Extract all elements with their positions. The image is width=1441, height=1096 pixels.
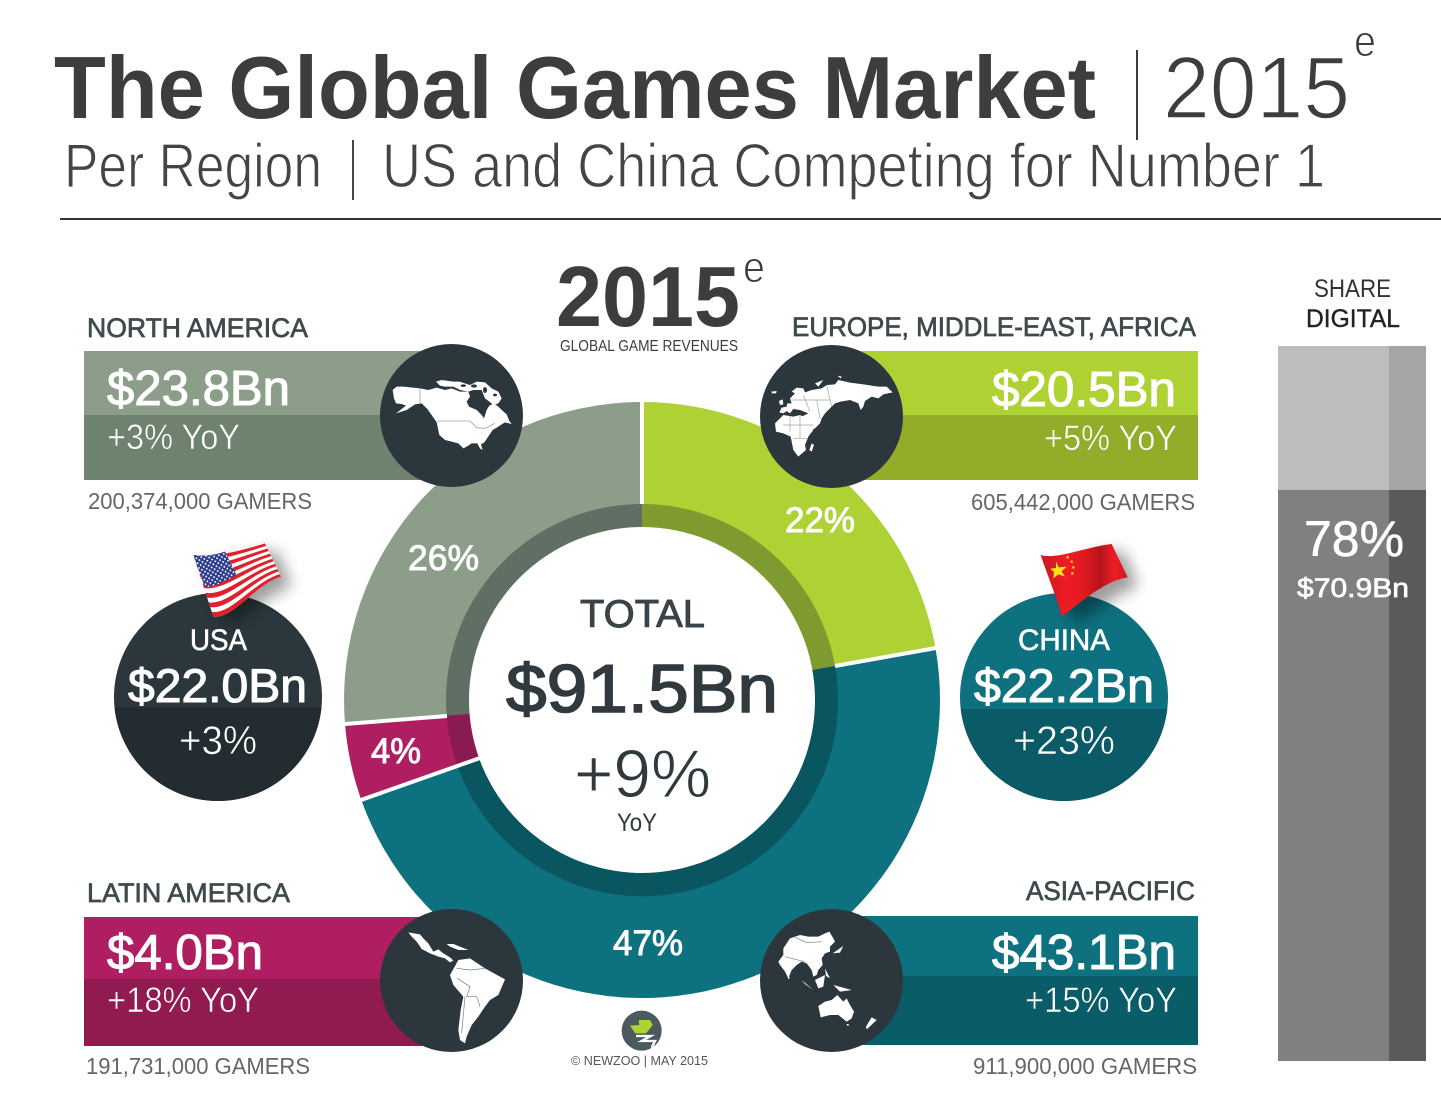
center total: YoY (617, 809, 657, 837)
china circle (960, 593, 1168, 801)
panel: share digital: DIGITAL (1306, 305, 1400, 333)
segment: Europe, Middle-East, Africa (642, 402, 936, 700)
panel: Europe, Middle-East, Africa (760, 312, 1198, 515)
panel: share digital: $70.9Bn (1297, 573, 1409, 603)
usa circle: +3% (179, 719, 257, 763)
icon: China flag (1041, 544, 1138, 623)
panel: share digital (1278, 275, 1426, 1061)
year heading: GLOBAL GAME REVENUES (560, 338, 738, 355)
panel: share digital: SHARE (1314, 275, 1391, 303)
logo: Newzoo (622, 1011, 662, 1051)
panel: North America: NORTH AMERICA (87, 313, 308, 343)
panel: Asia-Pacific: $43.1Bn (992, 926, 1176, 980)
panel: Europe, Middle-East, Africa: 605,442,000 GAMERS (971, 489, 1195, 515)
percent labels (371, 501, 855, 963)
center total: $91.5Bn (506, 651, 778, 727)
icon: Latin America map (408, 932, 505, 1043)
title: The Global Games Market (54, 38, 1096, 137)
segment: Latin America (345, 700, 642, 800)
usa circle: USA (190, 624, 247, 657)
china circle: CHINA (1018, 624, 1110, 657)
icon: North America map (393, 380, 512, 450)
segment: North America (344, 402, 642, 724)
percent labels: 47% (613, 924, 683, 963)
subtitle: US and China Competing for Number 1 (382, 132, 1325, 201)
panel: Europe, Middle-East, Africa: EUROPE, MIDDLE-EAST, AFRICA (792, 312, 1196, 342)
subtitle: Per Region (64, 132, 322, 201)
panel: share digital: 78% (1304, 511, 1404, 567)
center total (506, 593, 778, 837)
panel: Latin America: LATIN AMERICA (87, 878, 290, 908)
panel: Latin America: 191,731,000 GAMERS (86, 1053, 310, 1079)
panel: North America: +3% YoY (107, 418, 240, 457)
panel: Latin America: $4.0Bn (107, 926, 263, 980)
china circle: $22.2Bn (974, 659, 1154, 712)
panel: Latin America (84, 878, 523, 1079)
year heading: 2015 (556, 250, 740, 345)
usa circle: $22.0Bn (128, 659, 307, 712)
percent labels: 22% (785, 501, 855, 540)
panel: North America (84, 313, 523, 514)
title: e (1354, 17, 1376, 66)
title (54, 17, 1376, 140)
panel: Asia-Pacific (760, 876, 1198, 1079)
panel: Europe, Middle-East, Africa: +5% YoY (1044, 419, 1177, 458)
segment: Asia-Pacific (361, 648, 940, 998)
percent labels: 26% (408, 539, 479, 578)
panel: North America: 200,374,000 GAMERS (88, 488, 312, 514)
title: 2015 (1163, 38, 1350, 137)
copyright: © NEWZOO | MAY 2015 (571, 1053, 708, 1068)
percent labels: 4% (371, 732, 421, 771)
icon: Asia-Pacific map (778, 932, 877, 1029)
china circle: +23% (1013, 719, 1115, 763)
inner ring (446, 504, 838, 896)
year heading: e (743, 243, 765, 292)
center total: TOTAL (580, 593, 705, 636)
panel: Asia-Pacific: +15% YoY (1025, 981, 1177, 1020)
icon: US flag (193, 543, 292, 623)
subtitle (64, 132, 1325, 201)
panel: North America: $23.8Bn (107, 362, 290, 416)
usa circle (114, 593, 322, 801)
panel: Asia-Pacific: ASIA-PACIFIC (1026, 876, 1195, 906)
donut chart (344, 402, 940, 998)
panel: Latin America: +18% YoY (107, 981, 259, 1020)
center disc (469, 527, 815, 873)
panel: Asia-Pacific: 911,900,000 GAMERS (973, 1053, 1197, 1079)
panel: Europe, Middle-East, Africa: $20.5Bn (992, 363, 1176, 417)
icon: EMEA map (771, 376, 893, 457)
center total: +9% (574, 736, 711, 812)
